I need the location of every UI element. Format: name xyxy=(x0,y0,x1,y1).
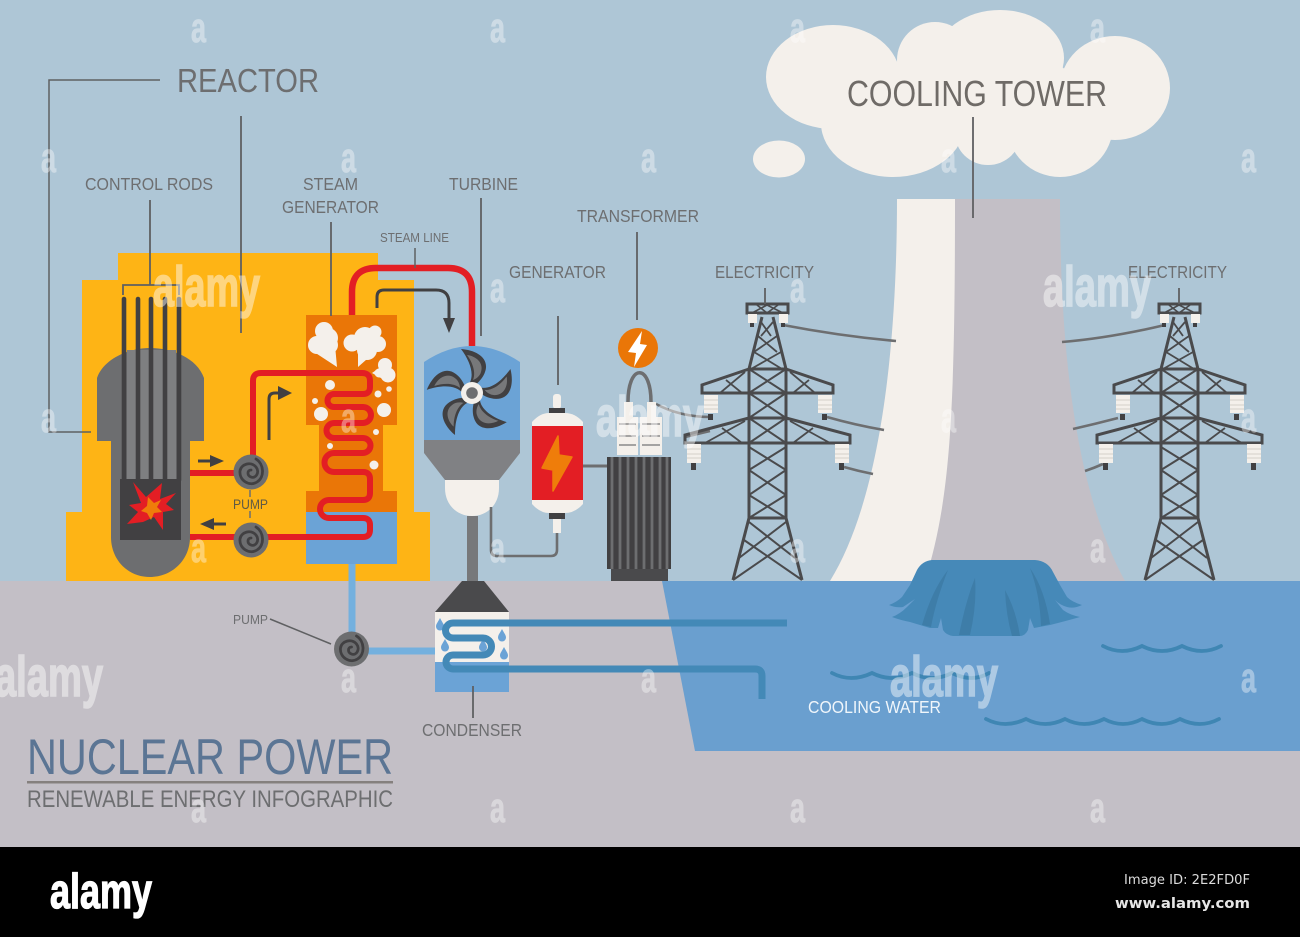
secondary loop pipes xyxy=(352,564,436,651)
transformer electricity icon xyxy=(618,328,658,368)
steam line pipe xyxy=(352,268,472,346)
label: cooling tower: COOLING TOWER xyxy=(847,73,1107,114)
leader: condenser xyxy=(472,686,474,718)
electricity pylon left xyxy=(685,304,850,580)
watermark small marks: a xyxy=(490,784,505,831)
leader: reactor bracket xyxy=(49,80,160,432)
turbine xyxy=(424,346,520,582)
watermark small marks: a xyxy=(790,264,805,311)
smoke cloud xyxy=(766,10,1170,177)
watermark small marks: a xyxy=(1241,394,1256,441)
label: steam generator xyxy=(282,174,379,217)
watermark small marks: a xyxy=(1090,524,1105,571)
leader: turbine xyxy=(480,198,482,336)
label: steam generator: STEAM xyxy=(303,174,358,194)
title underline xyxy=(27,781,393,784)
watermark small marks: a xyxy=(941,134,956,181)
label: transformer: TRANSFORMER xyxy=(577,206,699,226)
leader: reactor xyxy=(240,116,242,333)
label: electricity right: ELECTRICITY xyxy=(1128,262,1227,282)
main title: NUCLEAR POWER xyxy=(27,729,393,785)
condenser xyxy=(435,581,509,692)
watermark small marks: a xyxy=(490,524,505,571)
watermark small marks: a xyxy=(1241,654,1256,701)
watermark small marks: a xyxy=(1241,134,1256,181)
pump upper xyxy=(234,454,268,490)
arrow heads xyxy=(200,386,292,530)
electricity pylon right xyxy=(1097,304,1262,580)
watermark small marks: a xyxy=(41,394,56,441)
watermark small marks: a xyxy=(191,4,206,51)
leader: steam line xyxy=(414,248,416,268)
reactor vessel xyxy=(97,299,204,577)
subtitle: RENEWABLE ENERGY INFOGRAPHIC xyxy=(27,786,393,813)
condenser drops xyxy=(436,618,508,660)
watermark logos xyxy=(0,255,1151,709)
generator to transformer wire xyxy=(583,464,608,468)
generator xyxy=(532,394,583,533)
leader: electricity right xyxy=(1178,288,1180,304)
pump label ticks xyxy=(249,490,251,518)
label: condenser: CONDENSER xyxy=(422,720,522,740)
control rod bracket xyxy=(123,200,179,295)
watermark small marks: a xyxy=(490,4,505,51)
steam puffs xyxy=(308,322,396,382)
small cloud puff xyxy=(753,140,805,178)
watermark small marks: a xyxy=(341,134,356,181)
footer image id: Image ID: 2E2FD0F xyxy=(1124,873,1250,888)
turbine fan xyxy=(427,349,518,437)
label: control rods: CONTROL RODS xyxy=(85,174,213,194)
label: generator: GENERATOR xyxy=(509,262,606,282)
footer logo: alamy xyxy=(50,865,152,919)
pump label: PUMP xyxy=(233,497,268,512)
watermark small marks: a xyxy=(341,394,356,441)
leader: generator xyxy=(557,316,559,385)
label: steam line: STEAM LINE xyxy=(380,230,449,245)
ground xyxy=(0,581,1300,847)
watermark small marks: a xyxy=(341,654,356,701)
watermark small marks: a xyxy=(790,4,805,51)
generator bolt xyxy=(542,436,572,491)
watermark small marks: a xyxy=(41,134,56,181)
sky background xyxy=(0,0,1300,582)
watermark logos: alamy xyxy=(890,645,998,709)
cooling tower xyxy=(830,199,1125,581)
watermark logos: alamy xyxy=(153,255,260,319)
transformer xyxy=(607,328,671,581)
power lines xyxy=(656,325,1165,474)
label: steam generator: GENERATOR xyxy=(282,197,379,217)
watermark small marks: a xyxy=(790,784,805,831)
reactor core explosion xyxy=(127,482,176,530)
label: electricity left: ELECTRICITY xyxy=(715,262,814,282)
label: cooling water: COOLING WATER xyxy=(808,697,941,717)
watermark small marks: a xyxy=(941,394,956,441)
tower water pool xyxy=(889,560,1082,636)
transformer insulators xyxy=(617,373,662,455)
leader: transformer xyxy=(636,232,638,320)
watermark logos: alamy xyxy=(596,385,704,449)
watermark small marks: a xyxy=(191,784,206,831)
leader: electricity left xyxy=(764,288,766,304)
watermark logos: alamy xyxy=(1043,255,1151,319)
control rods xyxy=(124,299,179,480)
watermark small marks: a xyxy=(641,134,656,181)
leader: cooling tower xyxy=(972,117,974,218)
steam flow arrow xyxy=(377,290,455,333)
generator wire xyxy=(491,507,557,556)
cooling water pipe xyxy=(446,623,787,699)
watermark small marks: a xyxy=(641,654,656,701)
pump lower xyxy=(234,522,268,558)
watermark small marks: a xyxy=(1090,784,1105,831)
leader: condenser pump xyxy=(270,619,331,644)
watermark small marks: a xyxy=(191,524,206,571)
leader: steam generator xyxy=(330,222,332,316)
footer bar xyxy=(0,847,1300,937)
condenser pump xyxy=(334,632,369,666)
primary loop red pipe xyxy=(190,373,371,537)
label: reactor: REACTOR xyxy=(177,62,319,99)
waves xyxy=(832,646,1221,724)
reactor building xyxy=(66,253,430,581)
steam generator xyxy=(306,315,397,564)
footer url: www.alamy.com xyxy=(1115,896,1250,912)
water reservoir xyxy=(662,581,1300,751)
arrows around pumps xyxy=(198,393,282,524)
steam bubbles xyxy=(312,380,392,470)
label: turbine: TURBINE xyxy=(449,174,518,194)
watermark small marks: a xyxy=(790,524,805,571)
label: condenser pump: PUMP xyxy=(233,612,268,627)
watermark small marks: a xyxy=(1090,4,1105,51)
watermark small marks: a xyxy=(490,264,505,311)
